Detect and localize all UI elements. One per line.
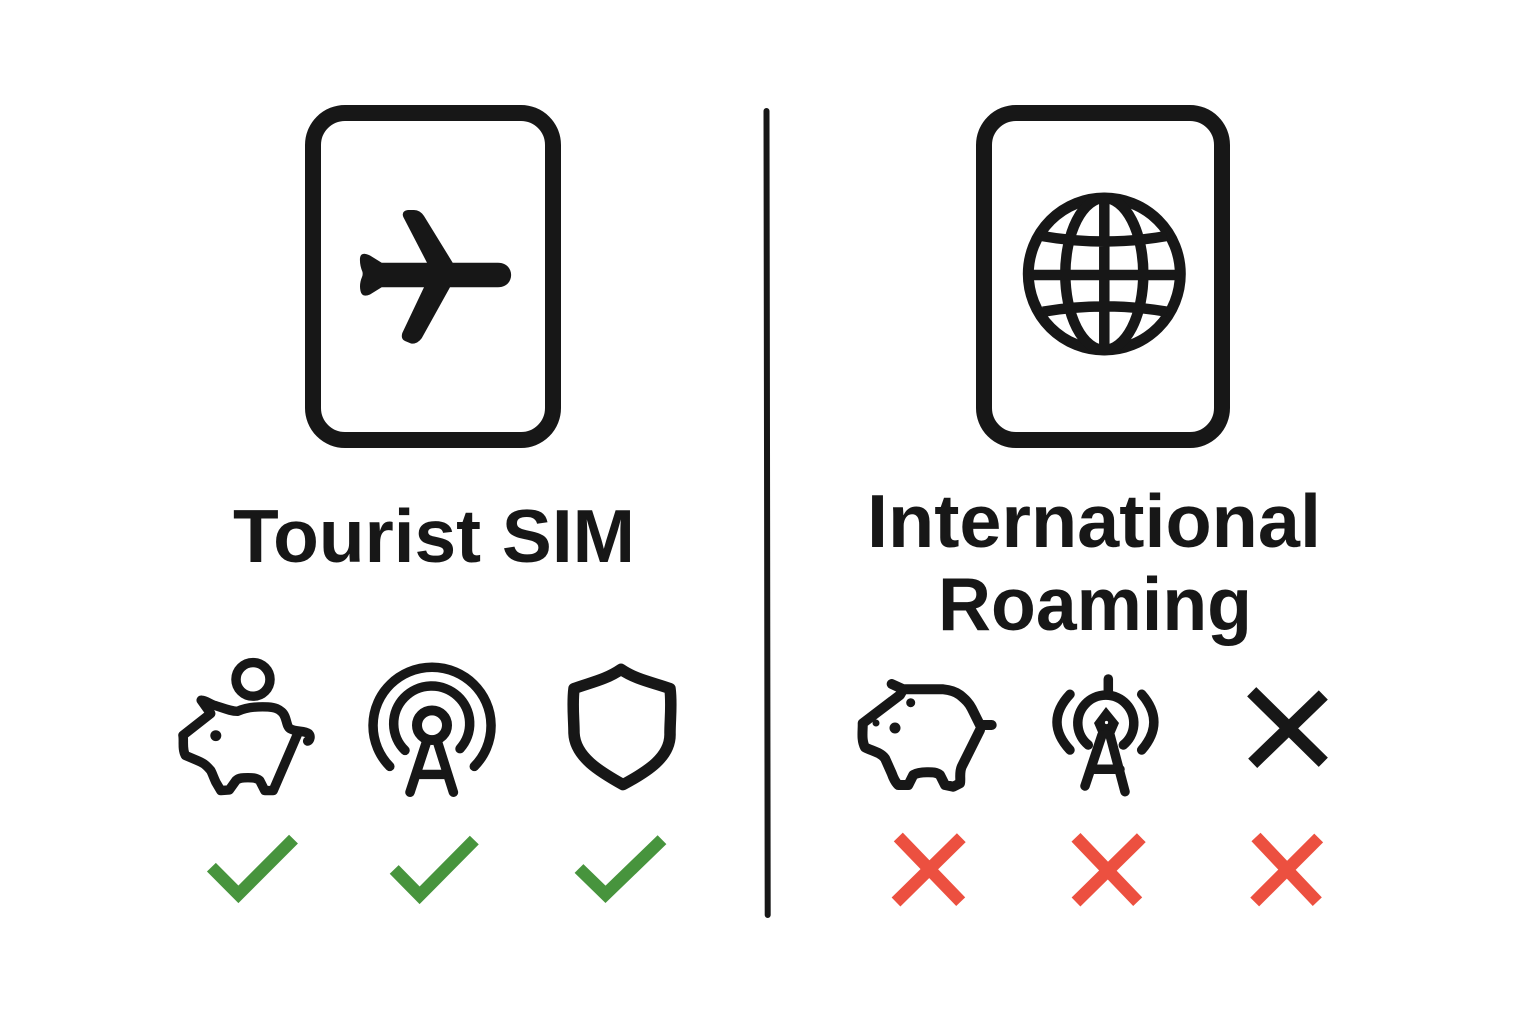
check mark: signal	[394, 840, 474, 895]
icon: globe	[1028, 198, 1181, 350]
cross mark: security	[1255, 837, 1319, 902]
heading: Tourist SIM: Tourist SIM	[233, 494, 635, 578]
icon: weak signal tower	[1057, 679, 1154, 792]
icon: signal tower	[373, 667, 491, 792]
icon: SIM card with globe	[984, 113, 1222, 440]
heading: International Roaming: International	[867, 479, 1321, 563]
check mark: security	[579, 840, 662, 894]
divider	[766, 111, 768, 915]
icon: black cross	[1252, 692, 1323, 763]
icon: shield	[573, 669, 671, 785]
icon: SIM card with airplane	[313, 113, 553, 440]
heading: International Roaming: Roaming	[938, 562, 1252, 646]
icon: airplane	[360, 210, 511, 344]
heading: International Roaming	[867, 479, 1321, 646]
cross mark: signal	[1076, 837, 1141, 902]
icon: piggy bank with coin	[183, 663, 310, 791]
icon: piggy bank	[862, 684, 992, 787]
panel: Tourist SIM	[183, 113, 671, 895]
panel: International Roaming	[862, 113, 1323, 902]
check mark: cost	[211, 839, 294, 894]
cross mark: cost	[896, 837, 961, 902]
